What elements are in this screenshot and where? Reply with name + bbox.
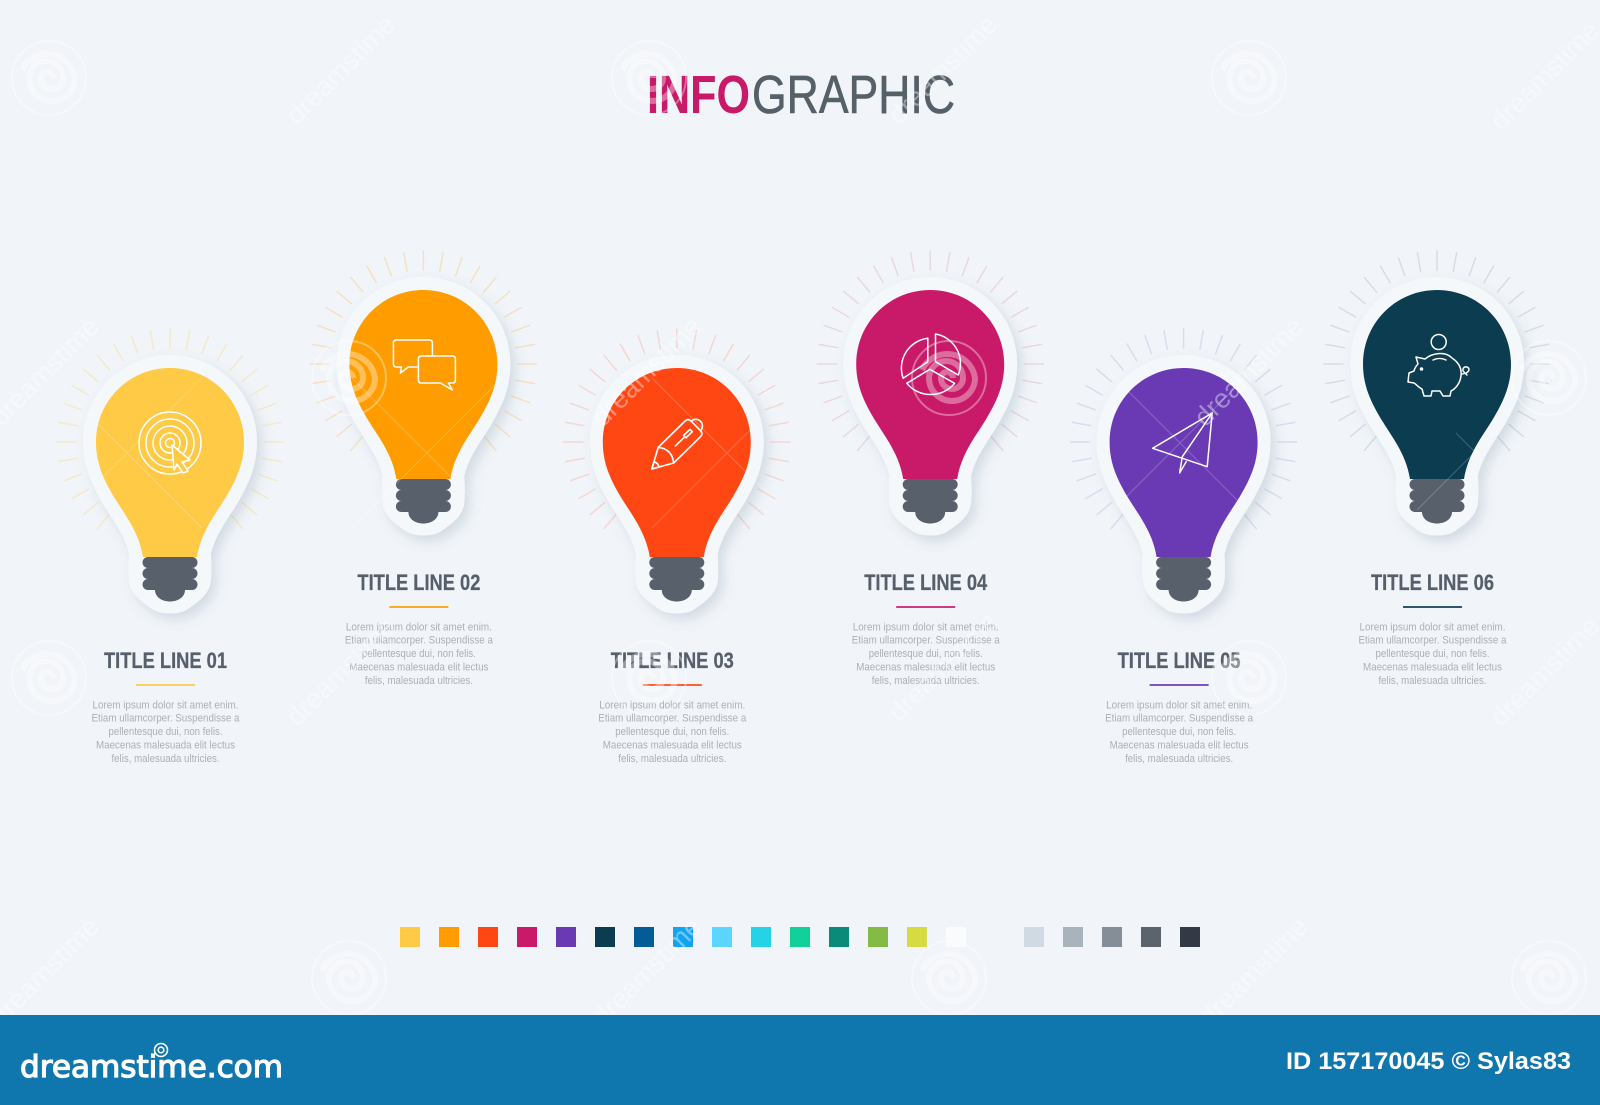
- heading 03: TITLE LINE 03: [611, 648, 734, 673]
- light rays 03: [564, 329, 790, 529]
- icon: piggy bank: [1408, 334, 1469, 396]
- icon: paper plane: [1153, 413, 1212, 473]
- text block 05: [1105, 700, 1254, 765]
- watermark overlay: dreamstime: [586, 311, 707, 432]
- icon: chat bubbles: [393, 340, 455, 390]
- rule 04: [896, 606, 955, 608]
- heading 04: TITLE LINE 04: [864, 570, 988, 595]
- panel: step 06: [1324, 251, 1550, 687]
- light rays 01: [57, 329, 283, 529]
- text block 03: [598, 700, 747, 765]
- watermark overlay: dreamstime: [1193, 911, 1314, 1032]
- bulb 05: [1110, 368, 1258, 614]
- heading 02: TITLE LINE 02: [357, 570, 480, 595]
- panel: step 04: [817, 251, 1043, 687]
- text block 04: [852, 622, 1000, 687]
- icon: brand spiral: [154, 1044, 168, 1056]
- light rays 02: [310, 251, 536, 451]
- panel: step 05: [1071, 329, 1297, 765]
- colour palette: [400, 927, 1200, 947]
- heading 05: TITLE LINE 05: [1118, 648, 1241, 673]
- text block 01: [92, 700, 240, 765]
- icon: pen: [644, 413, 708, 477]
- bulb 01: [96, 368, 244, 614]
- brand wordmark: dreamstime.com: [20, 1050, 283, 1085]
- image credit: ID 157170045 © Sylas83: [1286, 1048, 1571, 1075]
- title: INFO: [647, 65, 750, 125]
- watermark overlay: dreamstime: [280, 9, 401, 130]
- rule 01: [136, 684, 195, 686]
- watermark overlay: dreamstime: [882, 9, 1003, 130]
- rule 05: [1150, 684, 1209, 686]
- light rays 05: [1071, 329, 1297, 529]
- icon: pie chart: [901, 334, 960, 395]
- watermark overlay: dreamstime: [280, 611, 401, 732]
- footer banner: [0, 1015, 1600, 1105]
- watermark overlay: dreamstime: [1188, 311, 1309, 432]
- rule 03: [643, 684, 702, 686]
- bulb 02: [349, 290, 497, 536]
- text block 06: [1358, 622, 1507, 687]
- panel: step 02: [310, 251, 536, 687]
- heading 01: TITLE LINE 01: [104, 648, 227, 673]
- light rays 06: [1324, 251, 1550, 451]
- bulb 06: [1363, 290, 1511, 536]
- bulb 04: [856, 290, 1004, 536]
- text block 02: [345, 622, 494, 687]
- title: [647, 65, 955, 125]
- panel: step 01: [57, 329, 283, 765]
- icon: target with cursor: [139, 412, 201, 474]
- watermark overlay: dreamstime: [882, 606, 1003, 727]
- bulb 03: [603, 368, 751, 614]
- watermark overlay: dreamstime: [586, 911, 707, 1032]
- rule 02: [389, 606, 448, 608]
- rule 06: [1403, 606, 1462, 608]
- panel: step 03: [564, 329, 790, 765]
- heading 06: TITLE LINE 06: [1371, 570, 1494, 595]
- light rays 04: [817, 251, 1043, 451]
- title: GRAPHIC: [752, 65, 955, 125]
